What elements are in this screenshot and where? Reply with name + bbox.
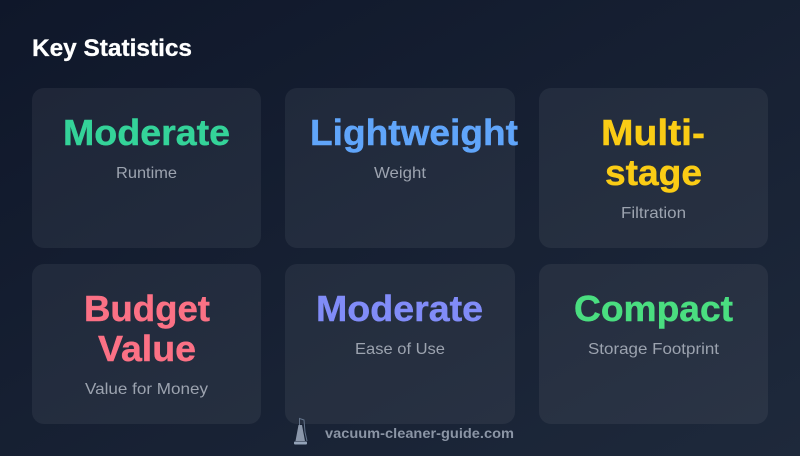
value: moderate runtime: Moderate — [63, 112, 230, 153]
value: budget value: Budget — [84, 288, 210, 329]
value: compact: Compact — [574, 288, 733, 329]
icon: upright vacuum — [294, 418, 307, 444]
value: multi-stage: Multi- — [601, 112, 705, 153]
label: weight: Weight — [374, 165, 427, 182]
value: multi-stage: stage — [605, 152, 702, 193]
label: storage footprint: Storage Footprint — [588, 341, 720, 358]
value: budget value: Value — [98, 328, 196, 369]
value: multi-stage — [601, 112, 705, 193]
value: moderate ease of use: Moderate — [316, 288, 483, 329]
panel: filtration — [539, 88, 768, 248]
panel: value for money — [32, 264, 261, 424]
panel: storage footprint — [539, 264, 768, 424]
value: budget value — [84, 288, 210, 369]
value: lightweight: Lightweight — [310, 112, 518, 153]
label: value for money: Value for Money — [85, 381, 208, 398]
panel: weight — [285, 88, 518, 248]
footer: site name: vacuum-cleaner-guide.com — [325, 425, 514, 441]
title: Key Statistics — [32, 35, 192, 62]
panel: runtime — [32, 88, 261, 248]
label: runtime: Runtime — [116, 165, 177, 182]
label: ease of use: Ease of Use — [355, 341, 445, 358]
label: filtration: Filtration — [621, 205, 686, 222]
panel: ease of use — [285, 264, 515, 424]
